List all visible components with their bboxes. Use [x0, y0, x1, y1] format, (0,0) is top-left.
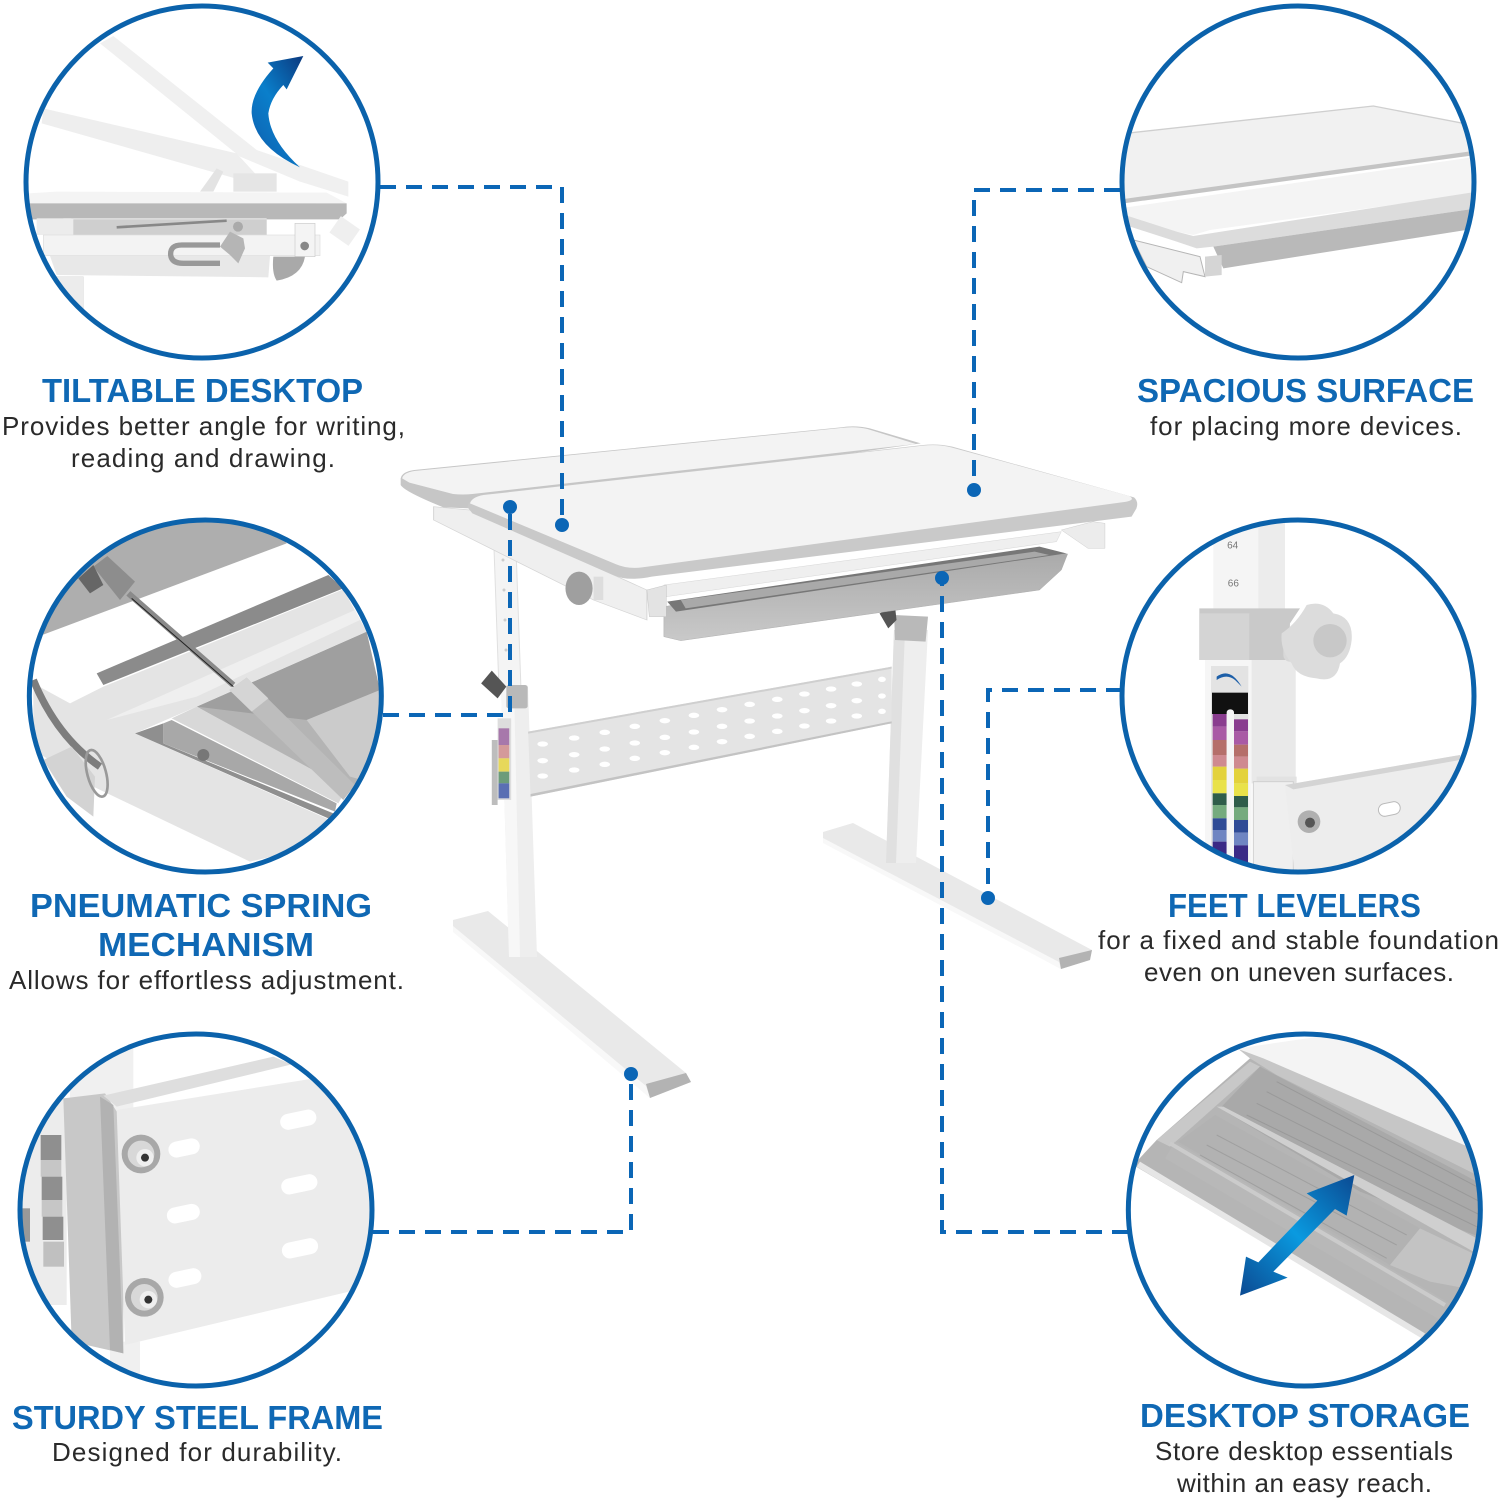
height scale sticker: [492, 718, 511, 805]
frame bracket and plate: [1252, 755, 1460, 870]
left foot: [453, 911, 691, 1098]
panel: feet levelers circle: [1122, 517, 1477, 877]
heading and text: pneumatic spring: [9, 887, 404, 995]
heading and text: tiltable desktop: [2, 372, 405, 473]
crossbar: [528, 667, 892, 797]
icon: knob: [1281, 604, 1352, 679]
scale numbers: 64: [1227, 540, 1239, 551]
panel: spacious surface circle: [1120, 6, 1477, 358]
right foot: [823, 823, 1092, 969]
left leg: [494, 548, 537, 957]
heading and text: desktop storage: Store desktop essentials: [1155, 1436, 1453, 1466]
front frame bar: [647, 522, 1105, 617]
scale numbers: [1228, 542, 1238, 586]
heading and text: spacious surface: for placing more devices.: [1150, 411, 1462, 441]
scale numbers: 66: [1228, 579, 1239, 590]
dashed connector: feet levelers: [981, 690, 1122, 905]
dashed connector: tiltable desktop: [380, 187, 569, 532]
heading and text: tiltable desktop: reading and drawing.: [71, 443, 335, 473]
right collar and knob: [880, 607, 928, 642]
panel: steel frame circle: [20, 1034, 377, 1386]
back desktop panel: [401, 426, 921, 508]
dashed connector: spacious surface: [967, 190, 1120, 497]
under frame left rail: [434, 507, 647, 620]
icon: bolts: [122, 1135, 164, 1317]
desk product photo: [401, 426, 1137, 1098]
dashed connector: pneumatic spring: [383, 500, 517, 715]
panel: tiltable desktop circle: [26, 6, 378, 358]
height collar and knob left: [481, 671, 528, 708]
heading and text: desktop storage: DESKTOP STORAGE: [1140, 1397, 1470, 1434]
heading and text: pneumatic spring: PNEUMATIC SPRING: [30, 887, 372, 924]
front desktop panel: [468, 444, 1137, 579]
heading and text: feet levelers: [1098, 887, 1499, 987]
heading and text: steel frame: Designed for durability.: [52, 1437, 342, 1467]
height chart sticker: [1211, 666, 1248, 866]
heading and text: desktop storage: within an easy reach.: [1176, 1468, 1432, 1498]
dashed connector: desktop storage: [935, 571, 1128, 1232]
heading and text: steel frame: STURDY STEEL FRAME: [12, 1399, 383, 1436]
panel: desktop storage circle: [1128, 1032, 1487, 1386]
heading and text: tiltable desktop: TILTABLE DESKTOP: [42, 372, 363, 409]
storage tray: [664, 547, 1068, 641]
heading and text: tiltable desktop: Provides better angle for writing,: [2, 411, 405, 441]
heading and text: spacious surface: SPACIOUS SURFACE: [1137, 372, 1474, 409]
dashed connector: steel frame: [373, 1067, 638, 1232]
heading and text: pneumatic spring: MECHANISM: [98, 926, 314, 963]
tilt knob: [565, 572, 603, 605]
heading and text: steel frame: [12, 1399, 383, 1467]
panel: pneumatic spring circle: [20, 510, 387, 872]
heading and text: feet levelers: for a fixed and stable foundation: [1098, 925, 1499, 955]
collar: [1199, 608, 1300, 660]
icon: double-headed arrow: [1240, 1175, 1354, 1296]
heading and text: desktop storage: [1140, 1397, 1470, 1498]
right leg: [886, 630, 928, 863]
upper desk assembly: [401, 426, 1137, 805]
heading and text: feet levelers: FEET LEVELERS: [1168, 887, 1421, 924]
heading and text: spacious surface: [1137, 372, 1474, 441]
heading and text: pneumatic spring: Allows for effortless adjustment.: [9, 965, 404, 995]
icon: curved tilt arrow: [252, 56, 303, 167]
heading and text: feet levelers: even on uneven surfaces.: [1144, 957, 1454, 987]
